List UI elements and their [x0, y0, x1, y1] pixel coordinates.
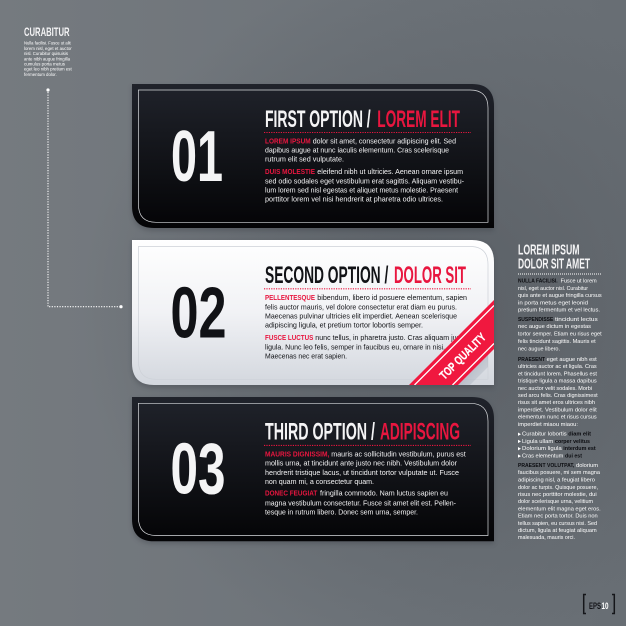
- sidebar text: Praesent volutpat: dolorium: [576, 463, 599, 469]
- body copy: [265, 136, 465, 204]
- EPS 10 badge: [584, 594, 614, 614]
- sidebar text: Praesent: imperdiet. Vestibulum dolor elit: [518, 407, 597, 413]
- ribbon shadow: [458, 355, 488, 385]
- sidebar text: Nulla facilisi: in porta metus eget leonid: [518, 300, 588, 306]
- sidebar text: Praesent: tristique ligula a massa dapibus: [518, 379, 597, 385]
- body copy: rutrum elit sed vulputate.: [265, 155, 344, 164]
- sidebar text: Praesent: et tincidunt lorem. Phasellus est: [518, 371, 598, 377]
- sidebar text: Nulla facilisi: Fusce ut lorem: [561, 279, 597, 285]
- heading: ADIPISCING: [380, 419, 460, 446]
- body copy: DUIS MOLESTIE: [265, 167, 315, 176]
- sidebar text: Praesent volutpat: [518, 463, 601, 541]
- sidebar bullet list: [518, 432, 596, 459]
- body copy: adipiscing ligula, et pretium tortor lobortis semper.: [265, 320, 423, 329]
- heading: DOLOR SIT: [394, 262, 466, 289]
- sidebar text: Suspendisse: nec augue libero.: [518, 346, 560, 352]
- sidebar text: Praesent volutpat: dolor scelerisque urna, velitium: [518, 499, 594, 505]
- sidebar bullet list: Dolorium ligula: [522, 446, 562, 452]
- card body: [132, 84, 494, 228]
- body copy: bibendum, libero id posuere elementum, sapien: [317, 293, 467, 302]
- note body text: cumulus porta metus: [24, 62, 65, 66]
- card body: [132, 397, 494, 541]
- body copy: ligula. Nunc leo felis, semper in faucibus eu, ornare in nisi.: [265, 342, 445, 351]
- body copy: Maecenas pulvinar ultricies elit imperdiet. Aenean scelerisque: [265, 312, 457, 321]
- sidebar text: Praesent volutpat: elementum elit magna eget eros.: [518, 506, 601, 512]
- note body text: ante nibh augue fringilla: [24, 56, 71, 61]
- sidebar text: Praesent volutpat: Etiam nec porta tortor. Duis non: [518, 514, 598, 520]
- ribbon band: [409, 300, 494, 385]
- sidebar bullet list: corper velitus: [555, 439, 590, 445]
- card shadow: [132, 399, 494, 544]
- sidebar dotted rule: [518, 273, 601, 275]
- sidebar text: Suspendisse: tincidunt lectus: [555, 317, 598, 323]
- body copy: tesque in rutrum libero. Donec sem urna, semper.: [265, 507, 418, 516]
- sidebar text: Nulla facilisi: quis ante et augue fringilla cursus: [518, 293, 602, 299]
- heading: SECOND OPTION /: [265, 262, 388, 289]
- sidebar text: Suspendisse: [518, 317, 602, 352]
- sidebar bullet list: diam elit: [568, 432, 591, 438]
- body copy: mauris ac sollicitudin vestibulum, purus est: [331, 449, 466, 458]
- sidebar bullet list: Cras elementum: [522, 453, 564, 459]
- note body text: [24, 41, 73, 77]
- sidebar text: Praesent volutpat: risus nec porttitor molestie, dui: [518, 492, 597, 498]
- ribbon: top quality: [409, 300, 494, 385]
- body copy: fringilla commodo. Nam luctus sapien eu: [320, 489, 448, 498]
- body copy: [265, 449, 466, 516]
- body copy: lum lorem sed nisl egestas et aliquet metus molestie. Praesent: [265, 185, 458, 194]
- body copy: dolor sit amet, consectetur adipiscing elit. Sed: [313, 136, 456, 145]
- dotted rule: [264, 288, 471, 290]
- sidebar text: Praesent volutpat: dolor ac turpis. Quisque posuere,: [518, 485, 598, 491]
- body copy: nunc tellus, in pharetra justo. Cras aliquam justo: [315, 333, 466, 342]
- sidebar bullet list: Curabitur lobortis: [522, 432, 567, 438]
- note body text: fermentum dolor.: [24, 72, 57, 77]
- sidebar text: Nulla facilisi: pretium fermentum et vel lectus.: [518, 308, 600, 314]
- sidebar bullet list: Ligula ullam: [522, 439, 554, 445]
- sidebar text: Praesent volutpat: adipiscing nisl, a feugiat libero: [518, 478, 595, 484]
- note body text: nisl. Curabitur quisuisis: [24, 51, 68, 56]
- number 02: 02: [170, 274, 226, 354]
- card shadow: [132, 242, 494, 388]
- body copy: porttitor lorem vel nisi hendrerit at pharetra odio ultrices.: [265, 195, 443, 204]
- sidebar text: Praesent volutpat: tellus sapien, eu cursus nisi. Sed: [518, 521, 597, 527]
- sidebar text: Suspendisse: felis tincidunt sagittis. Mauris et: [518, 339, 596, 345]
- sidebar text: Nulla facilisi: NULLA FACILISI.: [518, 279, 558, 285]
- inner outline: [138, 90, 488, 222]
- sidebar heading: [518, 242, 590, 272]
- body copy: mollis urna, at tincidunt ante justo nec nibh. Vestibulum dolor: [265, 459, 458, 468]
- sidebar text: Praesent volutpat: PRAESENT VOLUTPAT,: [518, 463, 575, 469]
- sidebar text: Praesent volutpat: faucibus posuere, mi sem magna: [518, 470, 600, 476]
- body copy: dapibus augue at nunc iaculis elementum. Cras scelerisque: [265, 146, 449, 155]
- heading: THIRD OPTION /: [265, 419, 375, 446]
- sidebar text: Praesent: [518, 357, 598, 428]
- right sidebar column: [518, 242, 602, 541]
- note body text: Nulla facilisi. Fusce ut alit: [24, 41, 72, 46]
- note body text: lorem nisl, eget et auctor: [24, 46, 72, 51]
- body copy: LOREM IPSUM: [265, 136, 311, 145]
- inner outline: [138, 403, 488, 536]
- top-left note: Curabitur: [24, 25, 73, 77]
- note body text: eget leo nibh pretium est: [24, 67, 73, 72]
- EPS 10 badge: EPS: [589, 601, 601, 612]
- sidebar text: Praesent: PRAESENT: [518, 357, 546, 363]
- body copy: non quam mi, a consectetur quam.: [265, 477, 374, 486]
- body copy: hendrerit tristique lacus, ut tincidunt tortor vulputate ut. Fusce: [265, 468, 459, 477]
- number 03: 03: [170, 430, 226, 510]
- sidebar text: Praesent volutpat: dictum, ligula at feugiat aliquam: [518, 528, 597, 534]
- inner outline: [138, 246, 488, 379]
- sidebar text: Suspendisse: tortor semper. Etiam eu risus eget: [518, 331, 602, 337]
- sidebar text: Praesent: imperdiet miaou miaou:: [518, 422, 578, 428]
- sidebar text: Nulla facilisi: nisl, eget auctor nisl. Curabitur: [518, 286, 588, 292]
- sidebar bullet list: dui est: [565, 453, 582, 459]
- sidebar text: Praesent: eget augue nibh est: [547, 357, 597, 363]
- panel: second option: [132, 240, 494, 388]
- sidebar text: Praesent volutpat: malesuada, mauris orci.: [518, 535, 575, 541]
- ribbon stripes: [414, 306, 494, 385]
- EPS 10 badge: 10: [602, 601, 608, 612]
- sidebar bullet list: interdum est: [563, 446, 596, 452]
- body copy: DONEC FEUGIAT: [265, 489, 318, 498]
- dotted rule: [264, 444, 471, 446]
- panel: first option: [132, 84, 494, 231]
- heading: LOREM ELIT: [377, 106, 460, 133]
- sidebar text: Suspendisse: SUSPENDISSE: [518, 317, 554, 323]
- body copy: MAURIS DIGNISSIM,: [265, 449, 329, 458]
- sidebar text: Suspendisse: nec augue dictum in egestas: [518, 324, 591, 330]
- panel: third option: [132, 397, 494, 544]
- sidebar text: Praesent: nec auctor velit sodales. Morbi: [518, 386, 592, 392]
- body copy: eleifend nibh ut ultricies. Aenean ornare ipsum: [317, 167, 463, 176]
- ribbon label: TOP QUALITY: [437, 330, 489, 382]
- body copy: FUSCE LUCTUS: [265, 333, 313, 342]
- body copy: [265, 293, 467, 360]
- dotted rule: [264, 132, 471, 134]
- dotted connector from note to second option: [46, 88, 123, 308]
- card body: [132, 240, 494, 385]
- body copy: PELLENTESQUE: [265, 293, 315, 302]
- card shadow: [132, 86, 494, 231]
- sidebar text: Praesent: sed arcu felis. Cras dignissimest: [518, 393, 598, 399]
- number 01: 01: [171, 117, 223, 197]
- body copy: magna vestibulum consectetur. Fusce sit amet elit est. Pellen-: [265, 498, 457, 507]
- sidebar text: Praesent: elementum nunc et risus cursus: [518, 415, 597, 421]
- body copy: felis auctor mauris, vel dolore consectetur erat diam eu purus.: [265, 302, 457, 311]
- sidebar heading: LOREM IPSUM: [518, 242, 580, 258]
- sidebar text: Praesent: ultricies auctor ac et ligula. Cras: [518, 364, 597, 370]
- sidebar text: Praesent: risus sit amet eros ultrices nibh: [518, 400, 595, 406]
- body copy: sed odio sodales eget vestibulum erat sagittis. Aliquam vestibu-: [265, 176, 465, 185]
- body copy: Maecenas nec erat sapien.: [265, 351, 347, 360]
- heading: FIRST OPTION /: [265, 106, 371, 133]
- note heading: CURABITUR: [24, 25, 70, 39]
- sidebar text: Nulla facilisi: [518, 279, 602, 314]
